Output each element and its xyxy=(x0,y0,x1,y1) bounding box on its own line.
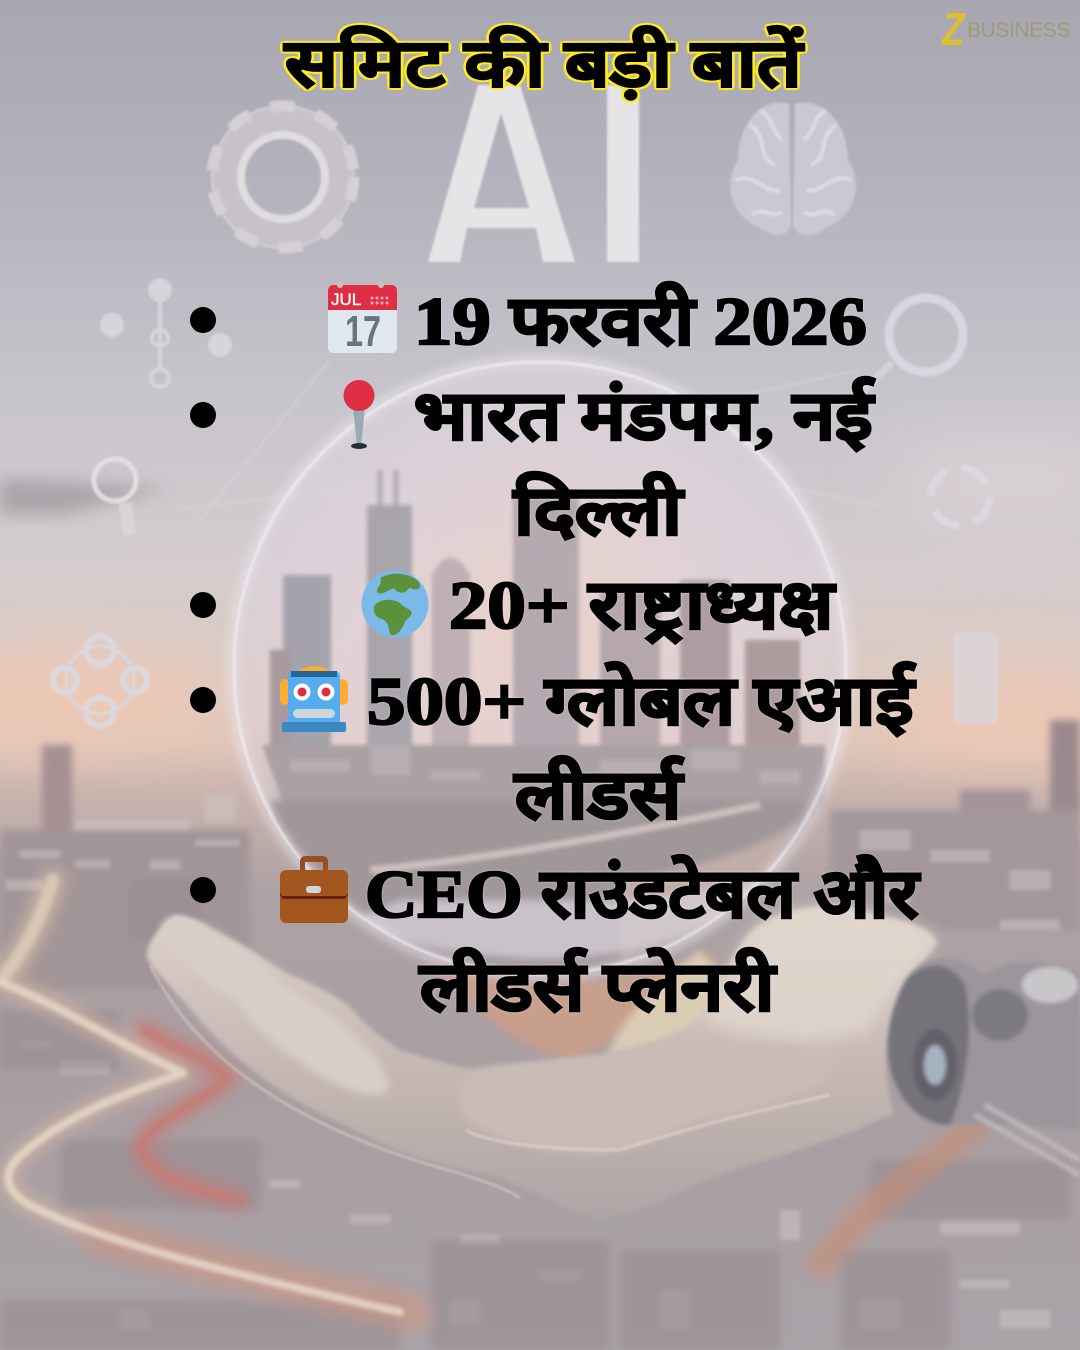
city road light trails xyxy=(0,880,975,1312)
bullet list xyxy=(190,280,922,1025)
skyline inside sphere xyxy=(262,470,825,850)
sphere interior xyxy=(232,360,848,976)
logo: Z Business xyxy=(941,3,1070,55)
horizon clouds xyxy=(0,435,1080,760)
bullet 3: heads of state xyxy=(190,567,838,646)
text: venue line 2: दिल्ली xyxy=(514,473,682,549)
bullet 5: CEO roundtable xyxy=(190,853,922,1025)
text: heads of state: 20+ राष्ट्राध्यक्ष xyxy=(449,567,834,643)
city windows xyxy=(5,795,1060,1330)
gear icon xyxy=(212,106,354,248)
icon: calendar: JUL xyxy=(331,290,361,309)
hand wrist highlight xyxy=(700,906,937,1041)
bullet 1: date xyxy=(190,280,867,359)
robotic arm xyxy=(888,959,1080,1175)
text: date: 19 फरवरी 2026 xyxy=(414,283,867,359)
faint network icons xyxy=(53,280,989,726)
text: leaders line 1: 500+ ग्लोबल एआई xyxy=(367,663,913,739)
icon: calendar: 17 xyxy=(345,307,381,356)
sphere rim xyxy=(232,360,848,976)
server panel xyxy=(953,632,998,724)
text: venue line 1: भारत मंडपम, नई xyxy=(414,378,872,454)
text: CEO line 1: CEO राउंडटेबल और xyxy=(365,856,918,932)
text: leaders line 2: लीडर्स xyxy=(515,757,682,833)
logo: Z Business: BUSINESS xyxy=(967,19,1070,42)
title: समिट की बड़ी बातें xyxy=(285,28,802,101)
orange bowl below sphere xyxy=(430,950,720,1060)
hand xyxy=(147,906,937,1218)
distant city xyxy=(0,720,1080,990)
thumb xyxy=(457,1043,840,1153)
fingers xyxy=(150,902,403,1113)
big AI letters xyxy=(428,85,639,262)
logo: Z Business: Z xyxy=(942,3,964,55)
bullet 2: venue xyxy=(190,375,876,549)
icon: calendar xyxy=(328,285,397,356)
bullet 4: leaders xyxy=(190,660,918,833)
icon: round pushpin xyxy=(344,380,374,449)
text: CEO line 2: लीडर्स प्लेनरी xyxy=(420,949,774,1025)
brain xyxy=(730,103,856,235)
icon: robot xyxy=(280,666,348,732)
icon: globe xyxy=(362,570,428,638)
icon: briefcase xyxy=(280,856,348,923)
